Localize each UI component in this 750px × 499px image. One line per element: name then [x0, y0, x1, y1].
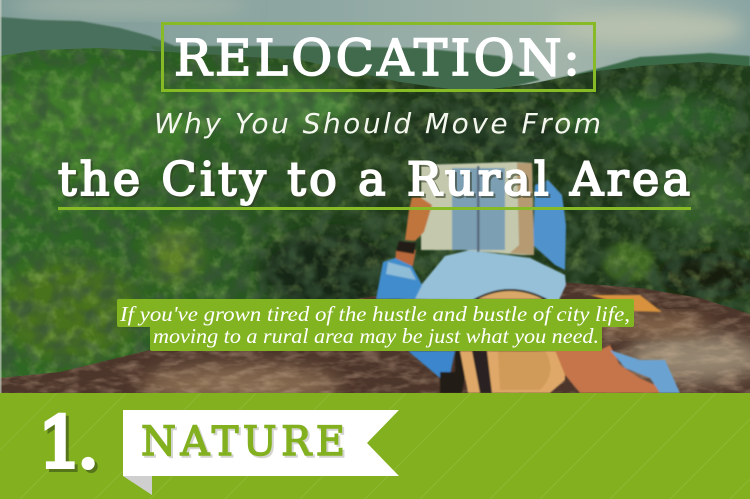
distant hills: [0, 17, 750, 110]
rock: [0, 282, 750, 393]
title box: [162, 24, 594, 90]
intro callout: moving to a rural area may be just what you need.: [153, 324, 599, 348]
section band: [0, 393, 750, 499]
section number: [38, 402, 102, 487]
person with book: [376, 162, 680, 393]
ribbon: Nature: [123, 410, 399, 495]
headline: the City to a Rural Area: [60, 154, 692, 208]
section number: .: [77, 402, 99, 484]
section number: 1: [38, 402, 83, 484]
ribbon: Nature: NATURE: [141, 419, 345, 465]
section number: .: [80, 405, 102, 487]
headline: the City to a Rural Area: [58, 152, 690, 206]
intro callout: If you've grown tired of the hustle and bustle of city life,: [119, 302, 630, 326]
section number: 1: [41, 405, 86, 487]
title: RELOCATION: RELOCATION:: [174, 29, 580, 87]
forest: [0, 40, 750, 393]
intro callout: [117, 299, 634, 351]
subtitle: Why You Should Move From: [154, 107, 601, 140]
ribbon: Nature: NATURE: [143, 421, 347, 467]
